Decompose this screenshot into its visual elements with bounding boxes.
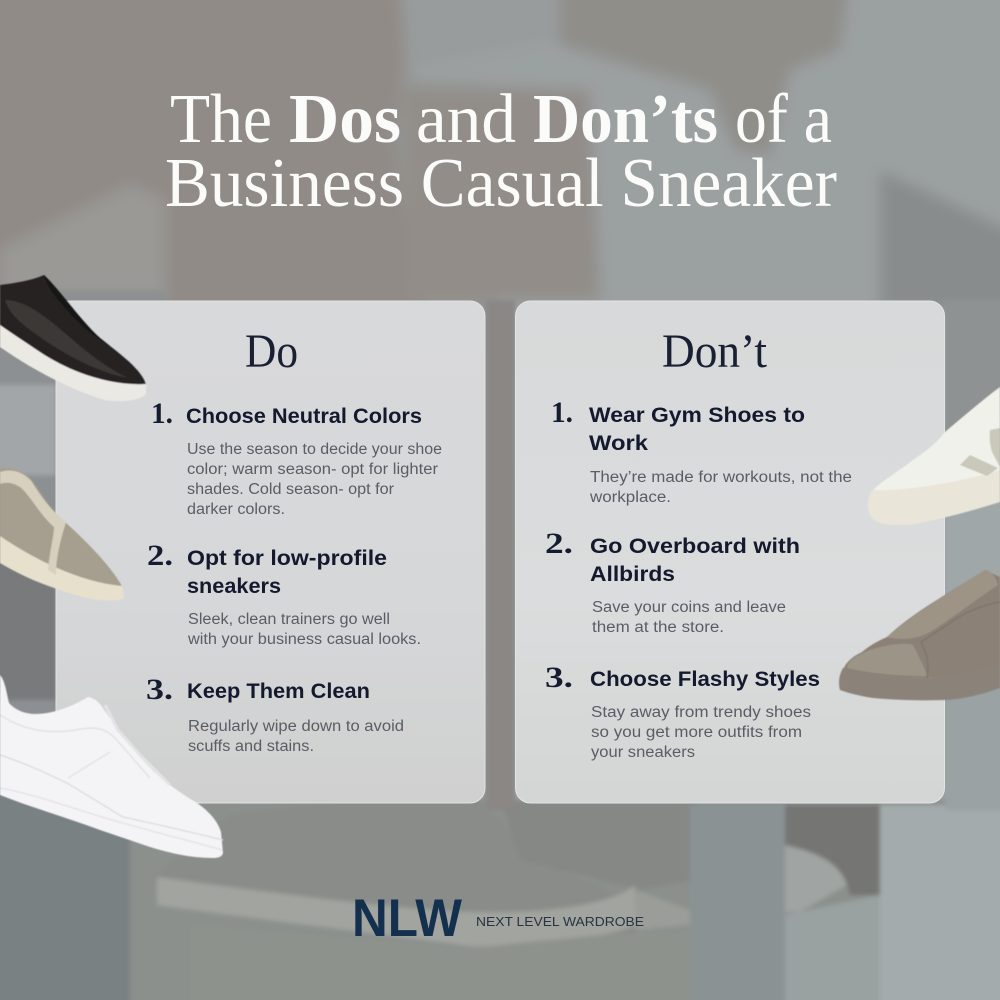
item 1: choose neutral colors: color; warm season- opt for lighter: [187, 461, 438, 478]
item 2: low-profile sneakers: 2.: [147, 539, 173, 572]
item 2: overboard with allbirds: them at the store.: [592, 619, 724, 636]
item 1: gym shoes: 1.: [551, 396, 573, 429]
icon: white sneaker: [0, 675, 223, 858]
item 3: flashy styles: [545, 661, 820, 761]
item 2: overboard with allbirds: Go Overboard with: [590, 534, 800, 558]
icon: black leather sneaker: [0, 275, 146, 401]
item 2: low-profile sneakers: sneakers: [187, 574, 281, 598]
panel heading: Don't: Don’t: [662, 325, 768, 378]
item 1: gym shoes: workplace.: [589, 489, 671, 506]
item 3: keep them clean: Keep Them Clean: [187, 679, 370, 703]
item 3: flashy styles: so you get more outfits from: [591, 724, 802, 741]
title: Don’ts: [533, 81, 718, 158]
item 1: choose neutral colors: Use the season to decide your shoe: [187, 441, 442, 458]
item 1: gym shoes: Wear Gym Shoes to: [589, 403, 805, 427]
icon: taupe suede sneaker: [839, 570, 1000, 700]
item 2: overboard with allbirds: [545, 527, 800, 636]
logo text: NEXT LEVEL WARDROBE: [476, 915, 644, 929]
item 3: keep them clean: 3.: [146, 673, 173, 706]
item 3: keep them clean: Regularly wipe down to avoid: [188, 718, 404, 735]
logo: NLW: NLW: [352, 889, 462, 948]
title: [165, 81, 837, 222]
panel: do: [56, 301, 485, 803]
item 2: low-profile sneakers: Opt for low-profile: [187, 546, 387, 570]
panel heading: Do: Do: [245, 325, 298, 378]
item 2: overboard with allbirds: Save your coins and leave: [592, 599, 786, 616]
item 3: flashy styles: Stay away from trendy shoes: [591, 704, 811, 721]
logo: NLW: [352, 889, 644, 948]
panel: don't: [516, 301, 944, 803]
item 3: flashy styles: 3.: [545, 661, 573, 694]
item 1: gym shoes: They’re made for workouts, not the: [590, 469, 852, 486]
item 3: keep them clean: [146, 673, 404, 755]
item 2: low-profile sneakers: Sleek, clean trainers go well: [188, 611, 390, 628]
item 1: gym shoes: Work: [589, 431, 648, 455]
title: The: [170, 81, 272, 158]
item 3: keep them clean: scuffs and stains.: [188, 738, 314, 755]
item 1: choose neutral colors: darker colors.: [187, 501, 285, 518]
item 2: overboard with allbirds: 2.: [545, 527, 573, 560]
title: Business Casual Sneaker: [165, 145, 837, 222]
icon: beige knit sneaker: [0, 468, 124, 601]
item 3: flashy styles: your sneakers: [591, 744, 695, 761]
item 2: low-profile sneakers: with your business casual looks.: [187, 631, 421, 648]
item 1: choose neutral colors: 1.: [151, 397, 173, 430]
item 1: choose neutral colors: shades. Cold season- opt for: [187, 481, 394, 498]
item 1: choose neutral colors: [151, 397, 442, 518]
title: of a: [735, 81, 832, 158]
icon: white and cream sneaker: [868, 387, 1000, 525]
title: Dos: [289, 81, 401, 158]
item 1: choose neutral colors: Choose Neutral Colors: [186, 404, 422, 428]
item 2: low-profile sneakers: [147, 539, 421, 648]
item 2: overboard with allbirds: Allbirds: [590, 562, 675, 586]
item 3: flashy styles: Choose Flashy Styles: [590, 667, 820, 691]
title: and: [416, 81, 516, 158]
item 1: gym shoes: [551, 396, 852, 506]
